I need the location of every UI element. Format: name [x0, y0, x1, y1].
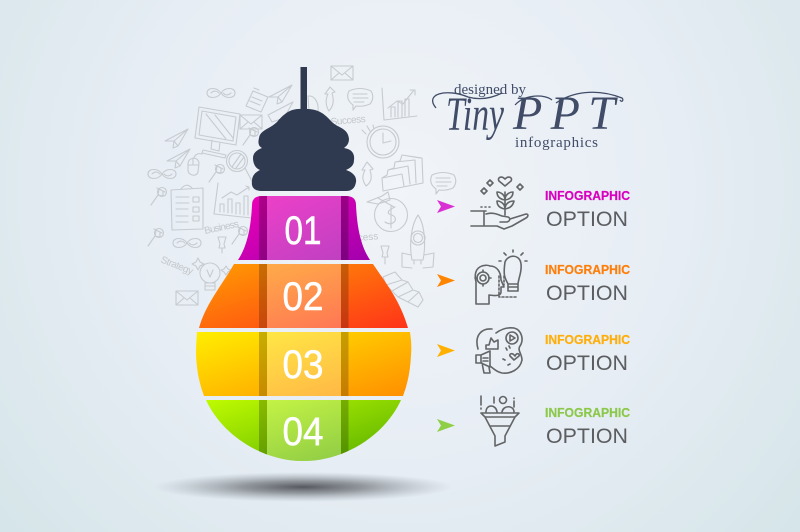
doodle: paper planes — [165, 85, 293, 168]
doodle: curved arrows — [325, 87, 373, 186]
option 1 label — [545, 189, 630, 231]
doodle: money bag — [367, 192, 408, 232]
doodle: magnifier — [226, 150, 254, 185]
text: option 2: OPTION — [546, 282, 628, 305]
doodle: mouse — [188, 154, 202, 175]
icon: megaphone with social bubbles — [476, 328, 522, 373]
text: option 3: OPTION — [546, 352, 628, 375]
option 4 label — [545, 406, 630, 448]
doodle: light bulb — [200, 263, 220, 290]
logo line: infographics: infographics — [515, 135, 598, 151]
doodle: stairs — [382, 155, 423, 191]
text: option 1: OPTION — [546, 208, 628, 231]
segment 03 — [196, 332, 412, 396]
arrow 4 — [437, 419, 455, 432]
heading: option 1: INFOGRAPHIC — [545, 189, 630, 203]
segment 02: 02 — [282, 275, 324, 319]
doodle cloud: business sketches behind the bulb — [148, 66, 456, 307]
doodle: rocket — [402, 215, 434, 268]
icon: head with gear and bulb — [475, 250, 527, 304]
doodle: clipboard — [171, 185, 203, 230]
segment 03: 03 — [282, 343, 324, 387]
light bulb — [192, 67, 416, 464]
doodle: lower stairs — [383, 272, 423, 307]
doodle word: Success: Success — [330, 114, 366, 128]
doodle: clock — [362, 125, 399, 158]
logo: designed by Tiny PPT infographics — [433, 82, 623, 151]
doodle word: Strategy: Strategy — [159, 255, 195, 278]
floor shadow — [153, 472, 453, 502]
arrow 2 — [437, 274, 455, 287]
doodle: rocket behind cord — [308, 96, 318, 112]
segment 04 — [206, 400, 401, 461]
bulb cap — [252, 109, 356, 191]
text: option 4: OPTION — [546, 425, 628, 448]
segment 01 — [238, 196, 370, 260]
doodle: monitor — [195, 107, 240, 158]
doodle: push pins — [148, 128, 389, 264]
logo swashes — [433, 92, 623, 108]
doodle word: cess: cess — [357, 231, 379, 244]
icon: hand holding plant — [471, 177, 528, 229]
doodle: stars — [192, 258, 231, 275]
arrow 3 — [437, 344, 455, 357]
option 3 label — [545, 333, 630, 375]
heading: option 3: INFOGRAPHIC — [545, 333, 630, 347]
heading: option 2: INFOGRAPHIC — [545, 263, 630, 277]
doodle: notes — [246, 88, 268, 112]
segment 04: 04 — [282, 410, 324, 454]
doodle word: Business: Business — [203, 219, 240, 237]
logo script: PPT: PPT — [512, 87, 618, 140]
heading: option 4: INFOGRAPHIC — [545, 406, 630, 420]
doodle: envelopes — [176, 66, 353, 305]
bulb cord — [300, 67, 307, 113]
segment 01: 01 — [284, 209, 322, 253]
arrow 1 — [437, 200, 455, 213]
doodle: infinity loops — [148, 88, 235, 248]
segment 02 — [199, 264, 408, 328]
doodle: left bar chart — [214, 183, 252, 218]
logo script: Tiny: Tiny — [446, 88, 504, 141]
icon: funnel — [481, 396, 519, 446]
doodle: speech bubbles — [348, 88, 456, 194]
doodle: right bar chart — [382, 88, 417, 120]
option 2 label — [545, 263, 630, 305]
logo line: designed by: designed by — [454, 82, 526, 98]
